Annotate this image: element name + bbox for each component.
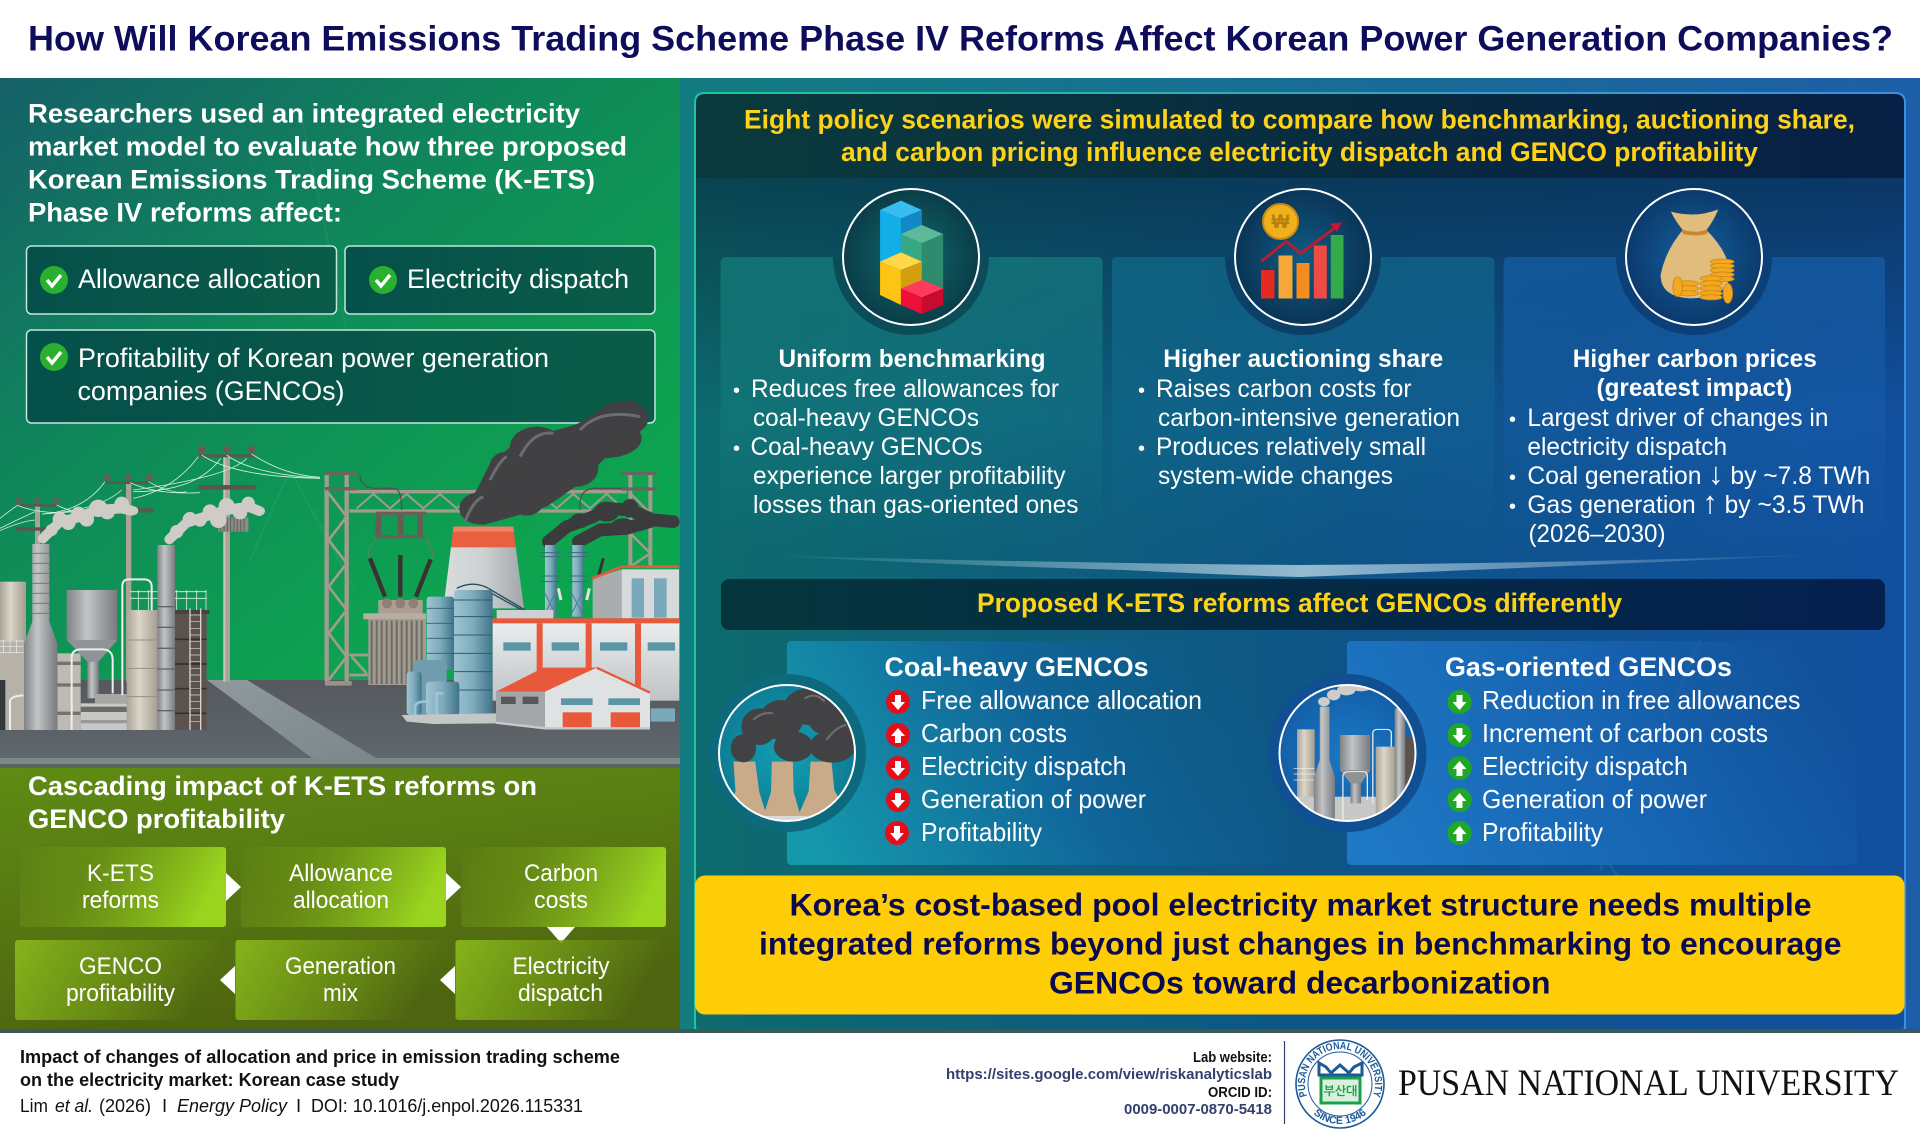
flow step: allowance allocation: allocation (293, 887, 389, 914)
arrow (226, 873, 241, 901)
list item: generation of power: Generation of power (921, 784, 1146, 814)
card text: experience larger profitability (753, 462, 1066, 490)
icon: rising bars and won coin (1261, 204, 1344, 298)
heading: Gas-oriented GENCOs (1445, 652, 1732, 682)
flow step: carbon costs (461, 847, 666, 927)
list item: reduction in free allowances: Reduction in free allowances (1482, 685, 1800, 715)
lab website and ORCID: ORCID ID: (1208, 1085, 1272, 1101)
card text: (2026–2030) (1528, 520, 1666, 548)
flow step: GENCO profitability: profitability (66, 980, 175, 1007)
box: allowance allocation: Allowance allocation (78, 264, 321, 294)
header band (696, 94, 1904, 178)
transformer (363, 512, 432, 685)
card text: • (1138, 438, 1145, 460)
panel: policy scenarios (695, 93, 1905, 1030)
header band: and carbon pricing influence electricity dispatch and GENCO profitability (841, 137, 1758, 167)
box: profitability of GENCOs: companies (GENCOs) (78, 376, 344, 406)
icon: rising bars and won coin: ₩ (1272, 212, 1290, 233)
intro text (28, 98, 627, 228)
logo: Pusan National University seal: SINCE 1946 (1314, 1109, 1366, 1124)
card text: Coal-heavy GENCOs (750, 433, 982, 461)
lab website and ORCID: 0009-0007-0870-5418 (1124, 1102, 1272, 1118)
icon: isometric blocks (880, 201, 943, 314)
twin stacks with dark smoke (541, 499, 673, 617)
heading: Cascading impact of K-ETS reforms on (28, 771, 537, 801)
lab website and ORCID: https://sites.google.com/view/riskanalyticslab (946, 1067, 1272, 1083)
flow step: K-ETS reforms (20, 847, 226, 927)
right substation and power plant (325, 400, 679, 729)
wires (0, 454, 320, 531)
flow step: K-ETS reforms: K-ETS (87, 860, 154, 887)
card text: Coal generation ↓ by ~7.8 TWh (1527, 456, 1870, 491)
callout: conclusion (695, 876, 1904, 1014)
small warehouse (496, 668, 675, 729)
panel: study intro (26, 98, 655, 423)
card: higher auctioning share (1112, 188, 1494, 489)
flow step: generation mix (236, 940, 442, 1020)
title: How Will Korean Emissions Trading Scheme Phase IV Reforms Affect Korean Power Generation Companies? (28, 18, 1893, 58)
panel: cascading impact (0, 768, 680, 1030)
panel: left green background (0, 78, 680, 768)
list item: profitability: Profitability (921, 817, 1042, 847)
steel gantry (325, 473, 657, 683)
header band: Eight policy scenarios were simulated to compare how benchmarking, auctioning share, (744, 104, 1855, 134)
card text: Produces relatively small (1156, 433, 1426, 461)
arrow (220, 966, 235, 994)
icon: money bag and coins (1661, 209, 1734, 303)
citation: I (162, 1095, 167, 1116)
list item: carbon costs: Carbon costs (921, 718, 1067, 748)
flow step: carbon costs: Carbon (524, 860, 598, 887)
card text: carbon-intensive generation (1158, 404, 1460, 432)
card text: Uniform benchmarking (778, 345, 1046, 373)
illustration: power plants scene (0, 400, 680, 768)
card text: • (1509, 467, 1516, 489)
citation: Energy Policy (177, 1095, 289, 1116)
card text: • (1138, 380, 1145, 402)
card text (1138, 345, 1460, 490)
citation: on the electricity market: Korean case study (20, 1069, 400, 1090)
card text: Raises carbon costs for (1156, 375, 1412, 403)
flow step: K-ETS reforms: reforms (82, 887, 159, 914)
heading (28, 771, 537, 834)
list item: electricity dispatch: Electricity dispatch (1482, 751, 1688, 781)
flow step: GENCO profitability: GENCO (79, 953, 162, 980)
card: coal-heavy GENCOs (708, 641, 1287, 865)
box: electricity dispatch (345, 246, 655, 314)
factory structures (0, 544, 209, 730)
citation: Lim (20, 1095, 48, 1116)
card text: • (733, 380, 740, 402)
icon: gas plant (1280, 683, 1419, 823)
card text: Reduces free allowances for (751, 375, 1059, 403)
card text: coal-heavy GENCOs (753, 404, 979, 432)
intro text: Korean Emissions Trading Scheme (K-ETS) (28, 164, 595, 194)
black smoke plume (459, 400, 648, 525)
card: higher carbon prices (1504, 179, 1885, 550)
flow step: generation mix: Generation (285, 953, 396, 980)
callout: conclusion: Korea’s cost-based pool electricity market structure needs multiple (790, 886, 1812, 922)
citation: (2026) (99, 1095, 151, 1116)
list item: increment of carbon costs: Increment of carbon costs (1482, 718, 1768, 748)
flow step: GENCO profitability (15, 940, 221, 1020)
card text (733, 345, 1078, 519)
list item: profitability: Profitability (1482, 817, 1603, 847)
intro text: Researchers used an integrated electricity (28, 98, 580, 128)
card text: Higher auctioning share (1163, 345, 1443, 373)
heading: Coal-heavy GENCOs (884, 652, 1148, 682)
box: profitability of GENCOs: Profitability of Korean power generation (78, 343, 549, 373)
section heading bar (721, 579, 1885, 630)
logo: Pusan National University seal: PUSAN NATIONAL UNIVERSITY (1298, 1042, 1382, 1098)
citation: I (296, 1095, 301, 1116)
flow step: carbon costs: costs (534, 887, 588, 914)
main plant building (493, 567, 679, 701)
list item: electricity dispatch: Electricity dispatch (921, 751, 1126, 781)
logo: Pusan National University seal (1295, 1039, 1385, 1129)
white steam (43, 497, 265, 539)
flow step: generation mix: mix (323, 980, 358, 1007)
card text: Gas generation ↑ by ~3.5 TWh (1527, 485, 1864, 520)
citation: et al. (55, 1095, 93, 1116)
logo: Pusan National University seal: 부산대 (1324, 1084, 1357, 1097)
callout: conclusion: GENCOs toward decarbonization (1049, 964, 1550, 1000)
flow step: allowance allocation: Allowance (289, 860, 393, 887)
card text: • (1509, 409, 1516, 431)
divider arrow swoosh (758, 553, 1853, 577)
box: profitability of GENCOs (26, 330, 655, 423)
list item: generation of power: Generation of power (1482, 784, 1707, 814)
background: right strip (680, 78, 1920, 1030)
card: gas-oriented GENCOs (1268, 641, 1857, 865)
intro text: Phase IV reforms affect: (28, 198, 342, 228)
section heading bar: Proposed K-ETS reforms affect GENCOs differently (977, 588, 1622, 618)
card text: electricity dispatch (1527, 433, 1727, 461)
icon: coal cooling towers with smoke (719, 685, 858, 823)
lab website and ORCID (946, 1050, 1272, 1118)
citation: Impact of changes of allocation and price in emission trading scheme (20, 1046, 620, 1067)
card text: (greatest impact) (1596, 374, 1792, 402)
left power lines and factory (0, 446, 320, 730)
bottom edge stripe (0, 1029, 1920, 1033)
card text (1509, 345, 1870, 548)
arrow (440, 966, 455, 994)
callout: conclusion: integrated reforms beyond just changes in benchmarking to encourage (759, 926, 1842, 962)
arrow (547, 927, 575, 943)
card text: Largest driver of changes in (1527, 404, 1828, 432)
blue storage tanks (402, 584, 525, 724)
list item: free allowance allocation: Free allowance allocation (921, 685, 1202, 715)
box: allowance allocation (26, 246, 336, 314)
cooling tower (443, 527, 524, 608)
card: uniform benchmarking (720, 188, 1102, 518)
flow step: electricity dispatch: dispatch (518, 980, 603, 1007)
heading: GENCO profitability (28, 804, 285, 834)
flow step: electricity dispatch: Electricity (512, 953, 610, 980)
ground (0, 680, 680, 768)
arrow (446, 873, 461, 901)
flow step: allowance allocation (241, 847, 446, 927)
citation: DOI: 10.1016/j.enpol.2026.115331 (311, 1095, 583, 1116)
box: electricity dispatch: Electricity dispatch (407, 264, 629, 294)
card text: • (1509, 496, 1516, 518)
card text: losses than gas-oriented ones (753, 491, 1078, 519)
lab website and ORCID: Lab website: (1193, 1050, 1272, 1066)
card text: • (733, 438, 740, 460)
citation (20, 1046, 620, 1116)
utility poles (16, 446, 256, 682)
intro text: market model to evaluate how three proposed (28, 132, 627, 162)
card text: Higher carbon prices (1573, 345, 1817, 373)
flow step: electricity dispatch (456, 940, 662, 1020)
card text: system-wide changes (1158, 462, 1393, 490)
